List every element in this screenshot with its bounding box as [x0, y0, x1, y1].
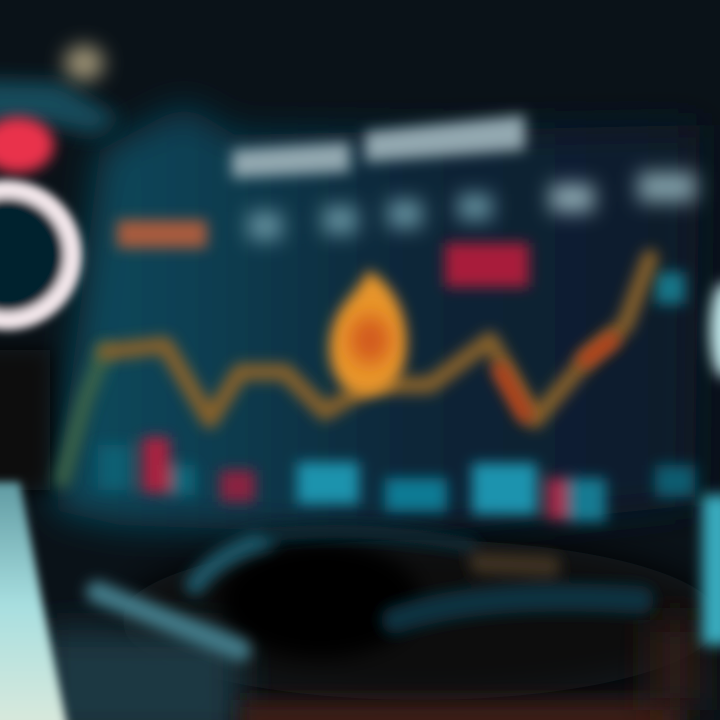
line: left green rising segment	[62, 350, 105, 480]
callout: orange label	[117, 220, 207, 248]
keyboard strokes	[97, 532, 640, 650]
glow: bottom left light column	[0, 482, 68, 720]
stroke: orange-brown key	[480, 563, 550, 566]
bar row	[98, 437, 695, 522]
line: main price line	[105, 258, 650, 420]
panel: chart screen	[55, 105, 700, 535]
icon: red blob	[0, 117, 54, 173]
glow: right light column	[702, 495, 720, 645]
stroke: top arc	[265, 532, 470, 545]
heading: blurred title	[232, 115, 525, 178]
panel: top-left teal shape	[0, 80, 120, 135]
line chart	[62, 258, 650, 480]
icon: ring glow right	[710, 282, 720, 378]
panel: right brown glow	[650, 620, 700, 710]
bar: teal far right	[655, 465, 695, 497]
keyboard: dark base	[120, 540, 720, 700]
panel: bottom brown glow	[240, 700, 680, 720]
callout: red label	[445, 243, 529, 287]
panel: left dark edge	[0, 350, 50, 490]
icon: white ring left	[0, 189, 73, 321]
text block: column labels	[248, 172, 696, 240]
stroke: arc key	[195, 540, 265, 585]
flame outer	[329, 270, 407, 395]
stroke: right key	[395, 598, 640, 620]
bar: teal	[170, 465, 195, 495]
flame inner	[350, 316, 390, 364]
icon: tan blob	[64, 45, 104, 81]
title part two	[365, 115, 525, 162]
title part one	[232, 142, 350, 178]
chip: teal label right	[655, 272, 685, 304]
stroke: long pale key	[97, 592, 240, 650]
bar: crimson	[220, 470, 255, 502]
icon: black bowl	[220, 542, 420, 658]
panel: bottom left muted floor	[40, 630, 240, 720]
bar: teal small	[98, 445, 130, 490]
bar: red thin	[547, 478, 567, 520]
bar: cyan right	[568, 478, 606, 522]
bar: cyan low	[385, 478, 447, 512]
bar: cyan	[297, 462, 359, 504]
icon: orange flame	[329, 270, 407, 395]
bar: cyan wide	[472, 463, 537, 515]
bar: red	[142, 437, 170, 493]
line: red highlights	[500, 340, 612, 415]
